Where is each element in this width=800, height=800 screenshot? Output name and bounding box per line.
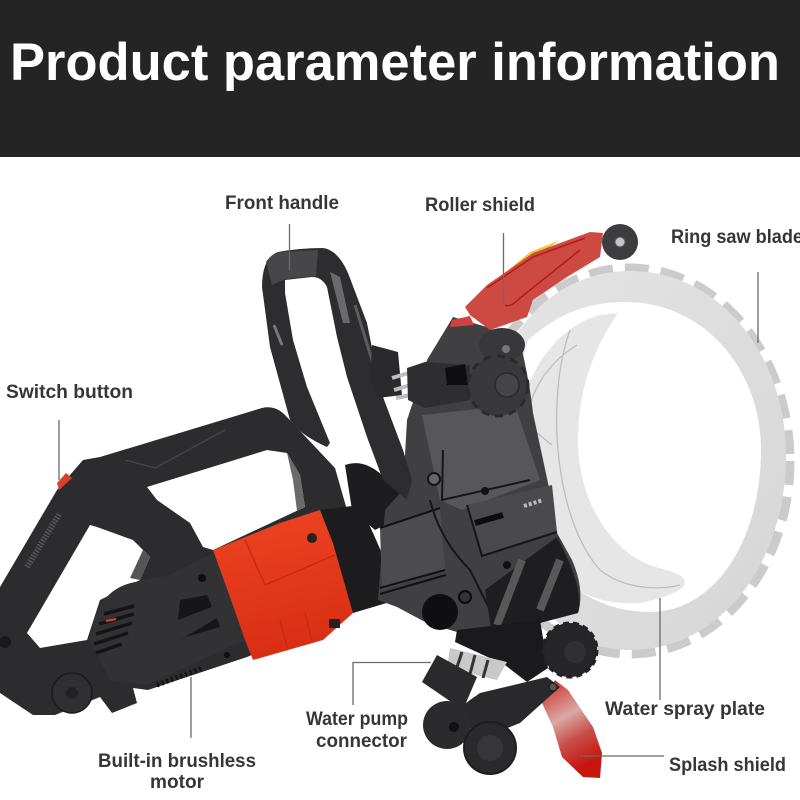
water pump connector [422, 648, 560, 774]
gearbox housing [378, 317, 580, 642]
dark guard tube [485, 537, 579, 642]
top roller [602, 224, 638, 260]
black collar [320, 505, 390, 613]
fan vents [94, 606, 134, 653]
splash shield [542, 680, 602, 778]
label: splash shield: Splash shield [669, 755, 786, 776]
chrome coupling [447, 648, 507, 680]
rear handle and motor housing [0, 407, 390, 715]
bottom locking knob [543, 623, 597, 677]
header banner [0, 0, 800, 157]
water pipe stub [422, 594, 458, 630]
shaft box [380, 508, 445, 590]
switch button [57, 473, 72, 490]
red motor sleeve [213, 510, 353, 660]
ring saw blade [470, 268, 790, 654]
lower guard strut [455, 620, 548, 682]
roller shield [450, 224, 638, 362]
blade teeth [470, 268, 790, 654]
lower roller [479, 328, 525, 362]
bracket [445, 677, 560, 735]
upper clamp and handle mount [370, 345, 470, 408]
rear handle mount behind front handle [345, 463, 412, 530]
label: front handle [225, 193, 339, 270]
bottom vent slots [157, 668, 203, 685]
label: switch button: Switch button [6, 382, 133, 403]
ventilation windows [178, 595, 220, 640]
slot [475, 515, 503, 523]
connector nut [422, 655, 477, 710]
title: Product parameter information [10, 33, 780, 92]
label: roller shield [425, 195, 535, 305]
label: front handle: Front handle [225, 193, 339, 214]
label: water spray plate: Water spray plate [605, 699, 765, 720]
rear wheel [423, 701, 471, 749]
label: switch button [6, 382, 133, 480]
blade ring [500, 271, 786, 650]
rear foot wheel [52, 673, 92, 713]
front wheel [464, 722, 516, 774]
label: built-in brushless motor: motor [150, 772, 205, 793]
label: built-in brushless motor: Built-in brushless [98, 751, 256, 772]
grip texture [27, 513, 60, 567]
label: built-in brushless motor [98, 677, 256, 793]
motor shell [90, 552, 245, 685]
label: roller shield: Roller shield [425, 195, 535, 216]
front handle [262, 248, 412, 500]
front panels [422, 405, 540, 510]
label: water pump connector: Water pump [306, 709, 408, 730]
label: water pump connector: connector [316, 731, 408, 752]
label: ring saw blade [671, 227, 800, 343]
water spray plate [520, 313, 685, 603]
top locking knob [468, 356, 528, 416]
handle inner wall [287, 453, 305, 511]
label: water pump connector [306, 662, 431, 752]
